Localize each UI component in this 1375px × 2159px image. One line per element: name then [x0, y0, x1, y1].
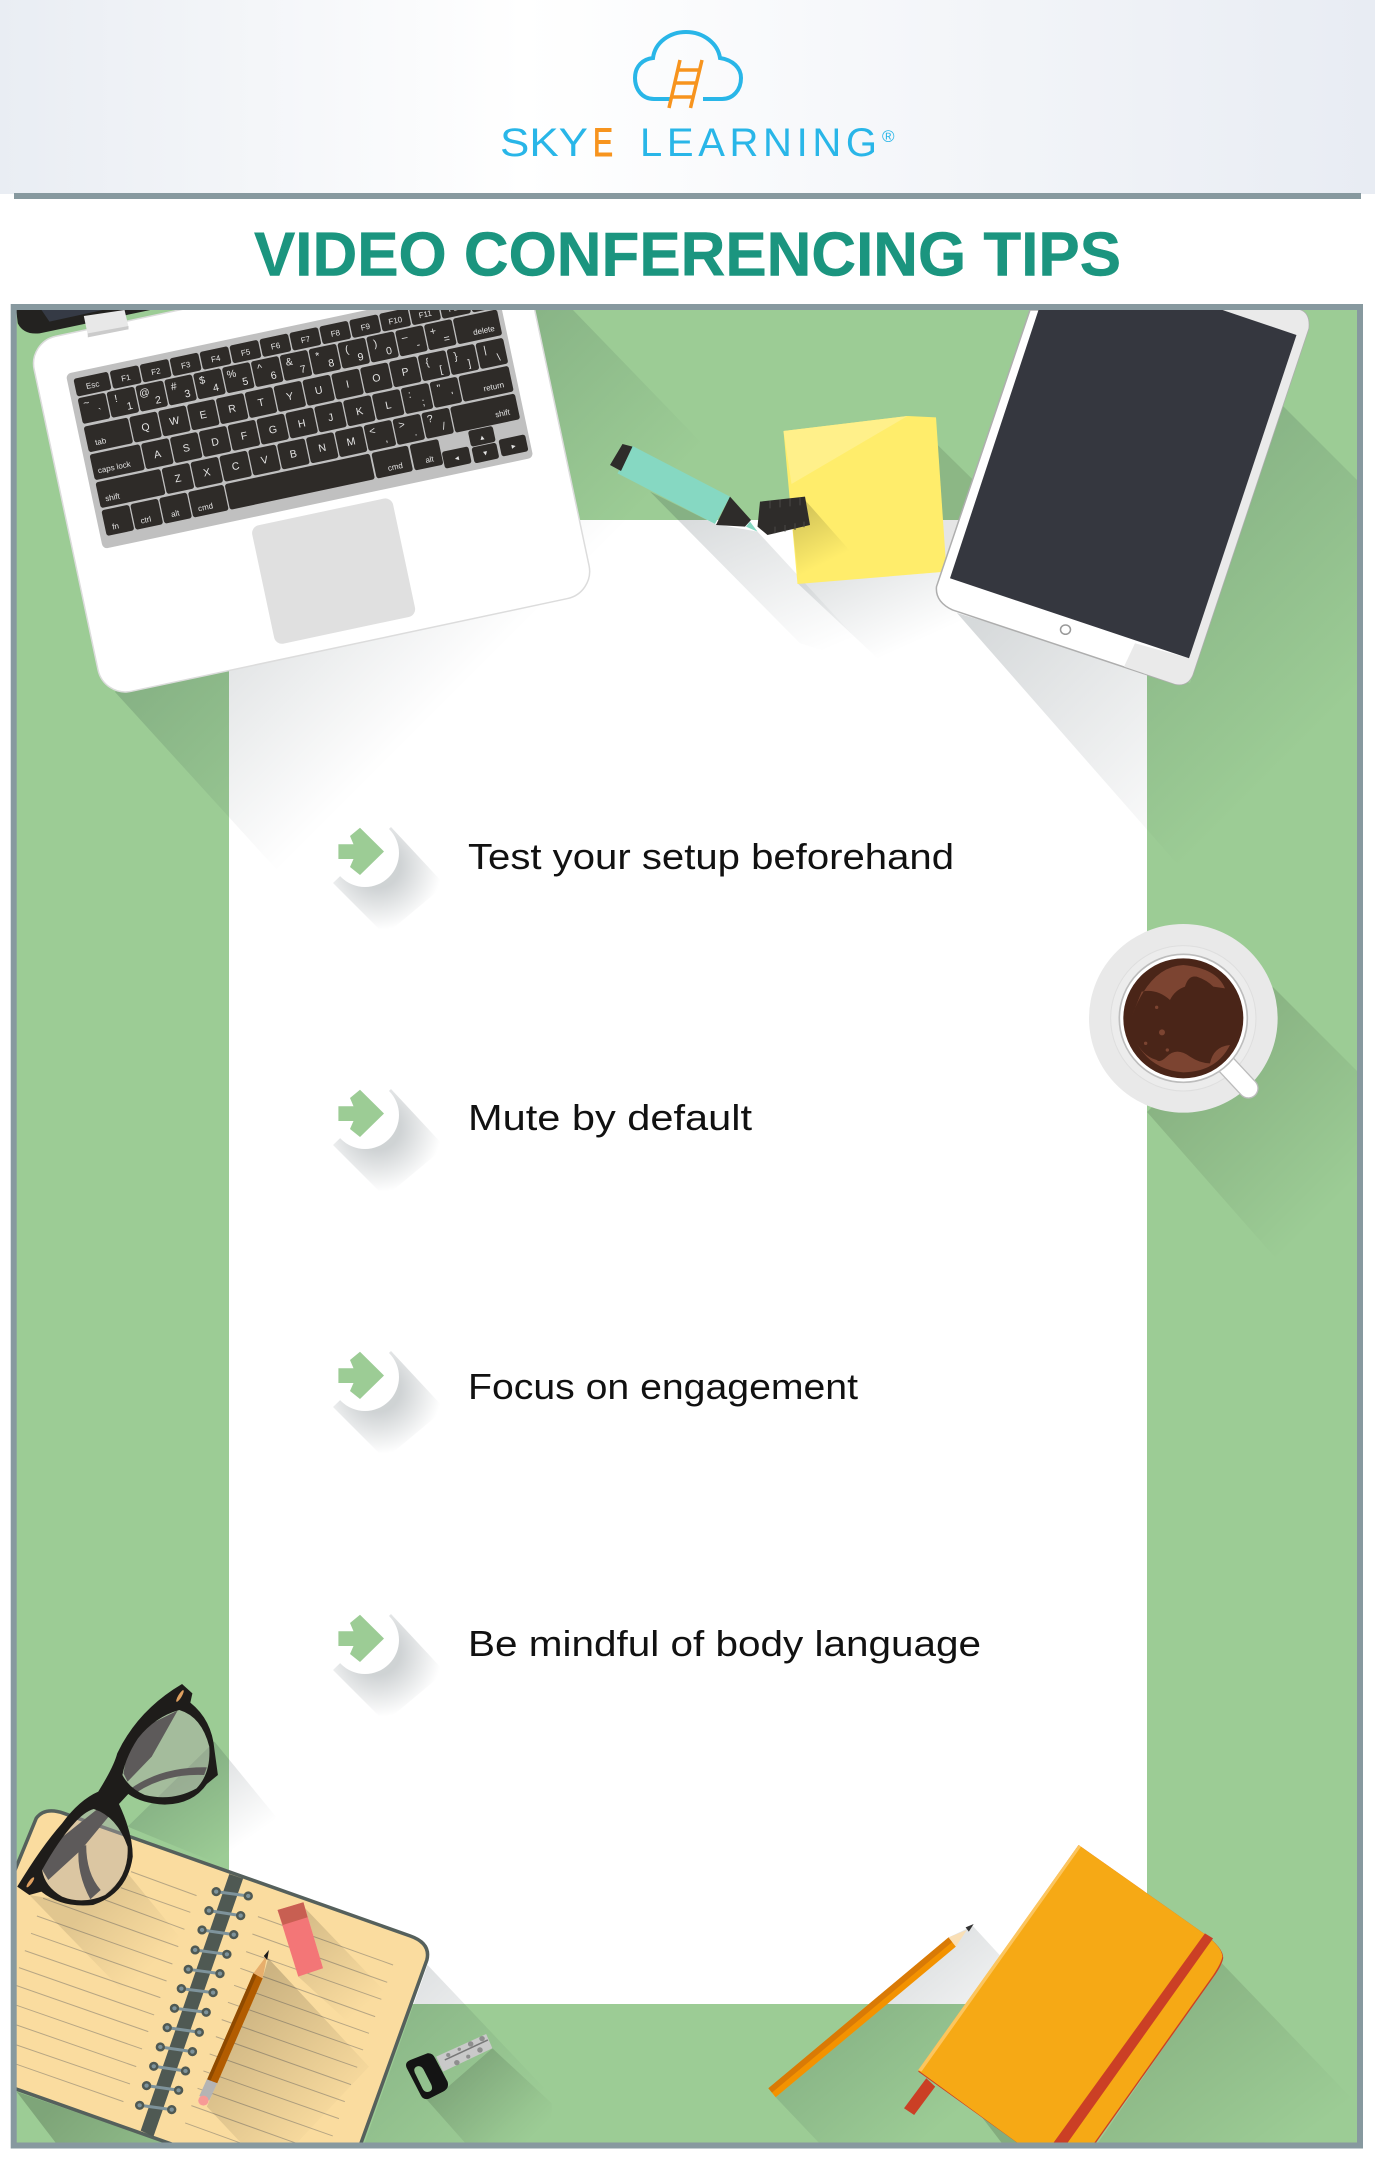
- tip text 2: Mute by default: [468, 1097, 752, 1138]
- keyboard keys: F8: [330, 328, 342, 339]
- shadow: pencil on notebook: [207, 1958, 369, 2143]
- shadow: laptop: [115, 310, 652, 832]
- header divider bar: [14, 193, 1361, 199]
- shadow: orange notebook lower edge: [979, 2113, 1024, 2145]
- notebook spine: [141, 1874, 243, 2137]
- keyboard keys: >: [398, 419, 406, 432]
- keyboard keys: ]: [467, 358, 472, 370]
- keyboard keys: D: [210, 436, 221, 449]
- keyboard keys: :: [407, 389, 412, 401]
- keyboard keys: &: [285, 356, 294, 369]
- keyboard keys: return: [483, 380, 505, 393]
- keyboard keys: N: [317, 442, 327, 455]
- keyboard keys: ;: [421, 396, 426, 408]
- shadow: orange notebook: [1096, 1963, 1360, 2145]
- keyboard keys: (: [344, 344, 350, 356]
- keyboard keys: 4: [212, 382, 220, 395]
- keyboard keys: A: [153, 448, 162, 461]
- keyboard keys: ?: [426, 413, 434, 426]
- keyboard keys: F1: [120, 373, 132, 383]
- keyboard keys: 7: [299, 363, 307, 376]
- keyboard keys: /: [441, 420, 447, 433]
- keyboard keys: V: [260, 454, 269, 467]
- keyboard keys: `: [98, 406, 104, 419]
- keyboard keys: ▴: [479, 432, 485, 442]
- notebook page: [0, 1811, 428, 2145]
- coffee cup and saucer: [1089, 924, 1278, 1113]
- keyboard keys: W: [168, 414, 181, 428]
- keyboard keys: ▸: [511, 441, 516, 451]
- keyboard keys: S: [182, 442, 191, 455]
- keyboard keys: ): [372, 338, 378, 350]
- tablet right bezel: [1124, 310, 1309, 684]
- tip 2: [333, 1089, 752, 1184]
- tablet: [936, 310, 1309, 684]
- keyboard keys: ,: [384, 433, 389, 445]
- keyboard keys: C: [231, 460, 241, 473]
- pencil on notebook: [198, 1950, 269, 2106]
- tip text 1: Test your setup beforehand: [468, 836, 954, 877]
- keyboard keys: F12: [448, 302, 463, 314]
- trackpad: [251, 497, 417, 645]
- keyboard keys: tab: [94, 436, 108, 447]
- keyboard keys: ◂: [454, 453, 460, 463]
- sticky note and highlighter: [610, 416, 972, 640]
- logo wordmark: [500, 121, 895, 165]
- keyboard keys: #: [170, 380, 178, 393]
- keyboard keys: shift: [494, 407, 511, 419]
- tip 4: [331, 1606, 981, 1722]
- desk items bottom left: [0, 1684, 559, 2159]
- keyboard keys: F4: [210, 353, 222, 364]
- arrow badge 3: [331, 1343, 445, 1459]
- keyboard keys: =: [443, 332, 451, 345]
- keyboard keys: H: [297, 417, 307, 431]
- tip rows: [331, 819, 981, 1722]
- saucer ring: [1111, 946, 1256, 1091]
- saucer: [1089, 924, 1278, 1113]
- keyboard keys: fn: [111, 521, 120, 532]
- arrow badge 1: [333, 827, 434, 922]
- glasses frame: [17, 1684, 218, 1906]
- keyboard keys: J: [327, 411, 335, 424]
- logo wordmark: SKY: [500, 121, 588, 165]
- keyboard keys: !: [113, 393, 119, 405]
- keyboard keys: 1: [126, 400, 134, 413]
- tip 1: [333, 827, 952, 922]
- shadow: highlighter: [650, 492, 824, 628]
- orange notebook: [918, 1845, 1223, 2145]
- arrow badge 2: [333, 1089, 434, 1184]
- keyboard keys: 3: [184, 388, 192, 401]
- keyboard keys: ~: [82, 397, 91, 410]
- keyboard keys: *: [314, 350, 321, 363]
- bookmark ribbon: [904, 2078, 935, 2115]
- keyboard keys: ^: [256, 362, 264, 375]
- coffee: [1123, 958, 1243, 1078]
- keyboard keys: shift: [104, 491, 121, 503]
- keyboard keys: alt: [170, 508, 181, 519]
- shadow: key: [424, 2048, 552, 2143]
- cup handle: [1225, 1063, 1248, 1088]
- keyboard keys: [74, 290, 528, 541]
- keyboard keys: %: [226, 368, 237, 381]
- keyboard keys: Esc: [85, 379, 100, 391]
- logo wordmark: LEARNING: [640, 121, 877, 165]
- keyboard keys: ctrl: [140, 514, 152, 526]
- keyboard keys: ▾: [482, 448, 488, 458]
- keyboard keys: 6: [270, 369, 278, 382]
- tip text 4: Be mindful of body language: [468, 1623, 981, 1664]
- glasses hinge pins: [25, 1689, 185, 1888]
- keyboard keys: F11: [418, 309, 433, 320]
- keyboard keys: F5: [240, 347, 252, 358]
- spiral notebook: [0, 1811, 428, 2145]
- keyboard keys: delete: [472, 324, 496, 337]
- keyboard keys: caps lock: [97, 459, 132, 475]
- keyboard keys: ': [451, 390, 455, 402]
- keyboard keys: +: [429, 325, 437, 338]
- dark device and clip behind laptop: [16, 310, 150, 334]
- icon: ladder: [669, 60, 702, 108]
- shadow: cap on sticky note: [792, 501, 842, 564]
- logo wordmark: ®: [882, 127, 895, 146]
- keyboard keys: T: [257, 396, 266, 410]
- keyboard keys: E: [199, 409, 208, 422]
- keyboard keys: \: [496, 351, 502, 364]
- keyboard keys: Q: [140, 421, 151, 434]
- keyboard keys: {: [424, 356, 431, 369]
- keyboard keys: ": [436, 382, 442, 395]
- sticky note fold highlight: [784, 416, 908, 484]
- icon: cloud outline: [635, 32, 741, 99]
- keyboard keys: F6: [270, 341, 282, 352]
- keyboard keys: 9: [357, 351, 365, 364]
- eraser: [278, 1902, 323, 1977]
- arrow badge 4: [331, 1606, 445, 1722]
- tablet body: [936, 310, 1309, 684]
- shadow: sticky on desk: [938, 446, 972, 557]
- keyboard keys: @: [138, 386, 151, 400]
- keyboard keys: M: [346, 435, 357, 449]
- white paper sheet: [229, 520, 1147, 2004]
- keyboard keys: Y: [285, 390, 295, 403]
- keyboard keys: alt: [424, 454, 435, 465]
- keyboard keys: }: [453, 350, 459, 363]
- tablet screen: [950, 310, 1296, 658]
- keyboard keys: Z: [174, 472, 183, 485]
- laptop body: [32, 310, 590, 693]
- laptop paper clip: [84, 310, 129, 337]
- notebook ruled lines: [17, 1872, 393, 2143]
- keyboard keys: 8: [327, 357, 336, 370]
- highlighter cap: [758, 497, 810, 535]
- keyboard keys: 5: [241, 375, 250, 388]
- logo wordmark: E: [593, 121, 613, 165]
- keyboard keys: O: [371, 372, 382, 385]
- shadow: tablet: [957, 406, 1357, 820]
- keyboard keys: cmd: [387, 461, 404, 473]
- coffee foam: [1132, 965, 1230, 1072]
- cup rim: [1119, 954, 1247, 1082]
- keyboard keys: I: [345, 378, 350, 391]
- tip text 3: Focus on engagement: [468, 1366, 858, 1407]
- shadow: sticky note: [798, 572, 940, 640]
- keyboard keys: F7: [300, 334, 312, 345]
- logo: Skye Learning: [500, 32, 895, 165]
- pencil: [768, 1924, 974, 2097]
- keyboard keys: –: [401, 331, 409, 344]
- shadow: glasses on desk: [128, 1742, 276, 1873]
- tip 3: [331, 1343, 858, 1459]
- keyboard keys: [: [438, 364, 444, 376]
- shadow: pencil: [776, 1926, 1007, 2145]
- shadow: glasses on notebook: [29, 1873, 193, 2007]
- tablet home button: [1060, 625, 1070, 634]
- header band: [0, 0, 1375, 194]
- eyeglasses: [17, 1684, 218, 1906]
- notebook spiral rings: [136, 1888, 252, 2113]
- shadow: notebook lower edge: [17, 2092, 176, 2147]
- keyboard keys: $: [198, 374, 206, 387]
- keyboard keys: |: [482, 344, 488, 356]
- keyboard keys: <: [368, 425, 377, 438]
- glasses lens tint: [42, 1710, 209, 1900]
- keyboard base: [66, 310, 532, 548]
- keyboard keys: P: [401, 366, 410, 379]
- highlighter: [610, 444, 758, 532]
- title: VIDEO CONFERENCING TIPS: [254, 220, 1121, 290]
- door key: [406, 2034, 492, 2099]
- laptop: [32, 310, 590, 693]
- shadow: eraser on notebook: [298, 1908, 393, 2035]
- keyboard keys: .: [413, 426, 418, 439]
- keyboard keys: 2: [154, 394, 163, 407]
- keyboard keys: F3: [180, 360, 192, 371]
- keyboard keys: L: [384, 399, 393, 412]
- keyboard keys: cmd: [197, 501, 214, 513]
- shadow: coffee cup: [1147, 987, 1357, 1210]
- sticky note: [784, 416, 946, 584]
- shadow: notebook right edge: [359, 1965, 559, 2159]
- keyboard keys: F: [240, 430, 249, 443]
- keyboard keys: U: [314, 384, 324, 397]
- keyboard keys: B: [289, 448, 298, 461]
- keyboard keys: R: [227, 402, 238, 416]
- keyboard keys: F2: [150, 366, 162, 377]
- desk items bottom right: [768, 1845, 1360, 2145]
- keyboard keys: 0: [385, 345, 393, 358]
- keyboard keys: X: [202, 466, 212, 479]
- keyboard keys: F9: [360, 322, 371, 333]
- keyboard keys: F10: [388, 315, 404, 327]
- keyboard keys: G: [268, 423, 278, 437]
- keyboard keys: -: [416, 339, 422, 351]
- keyboard keys: K: [355, 405, 364, 418]
- glasses temple arms: [41, 1711, 207, 1899]
